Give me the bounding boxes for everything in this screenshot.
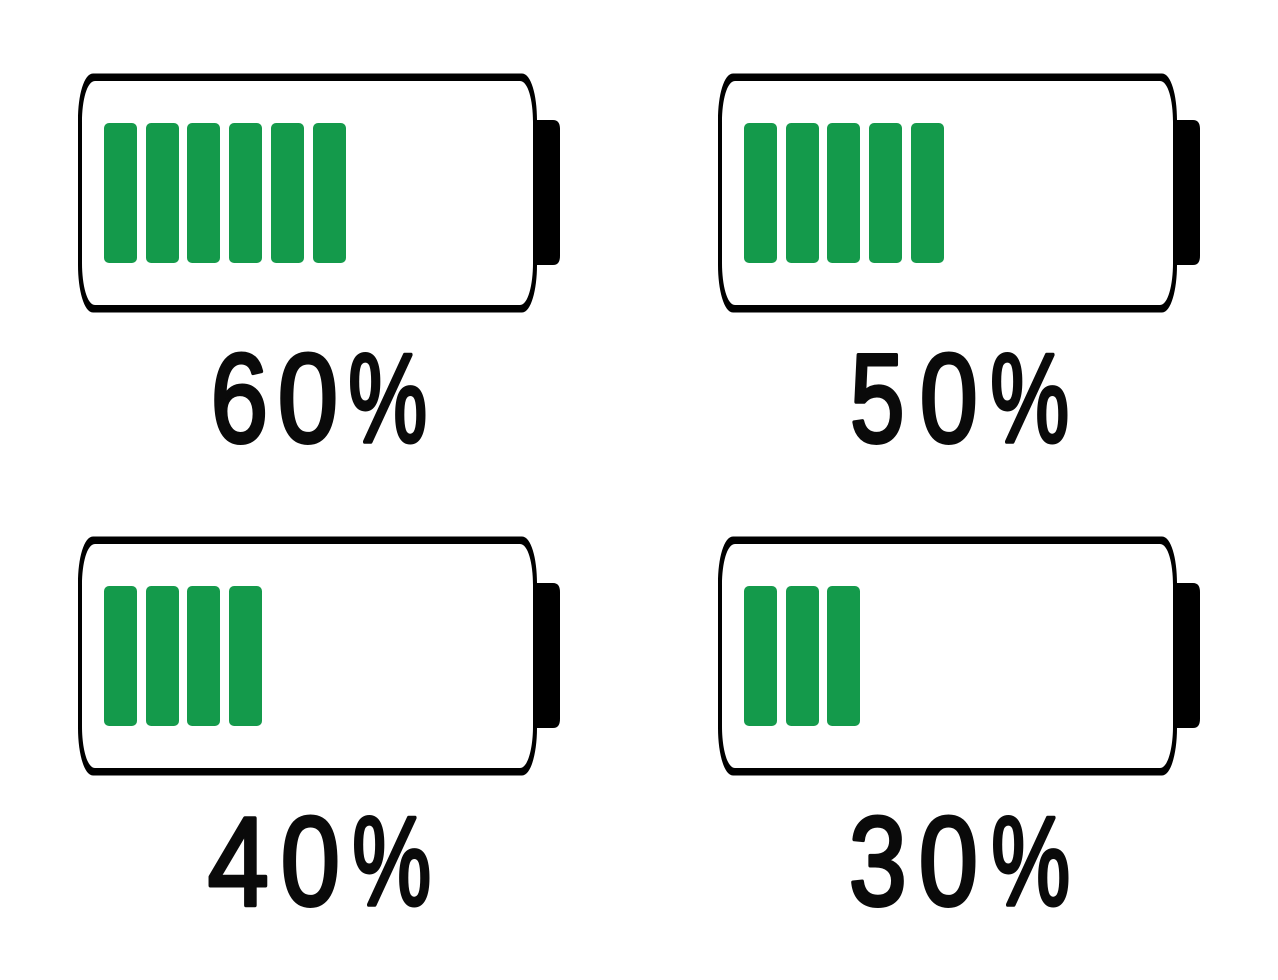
label: 40%: 0 [281, 791, 340, 932]
label: 30% [849, 791, 1070, 932]
icon: battery outline [718, 74, 1177, 312]
label: 30%: % [991, 791, 1070, 932]
label: 40%: % [352, 791, 431, 932]
charge bars: 4 segments [104, 586, 262, 726]
label: 50%: 5 [850, 328, 904, 469]
icon: battery terminal [533, 120, 560, 265]
label: 60%: 6 [211, 328, 268, 469]
label: 40% [208, 791, 431, 932]
panel: battery 40% [78, 536, 560, 932]
icon: battery terminal [533, 583, 560, 728]
label: 30%: 0 [919, 791, 978, 932]
icon: battery terminal [1173, 120, 1200, 265]
charge bars: 3 segments [744, 586, 860, 726]
panel: battery 30% [718, 536, 1200, 932]
icon: battery outline [78, 536, 537, 776]
label: 50%: % [990, 328, 1069, 469]
icon: battery outline [78, 74, 537, 312]
label: 60%: % [348, 328, 427, 469]
label: 40%: 4 [208, 791, 269, 932]
panel: battery 60% [78, 74, 560, 469]
label: 50% [850, 328, 1069, 469]
label: 30%: 3 [849, 791, 907, 932]
icon: battery terminal [1173, 583, 1200, 728]
label: 60% [211, 328, 427, 469]
icon: battery outline [718, 536, 1177, 776]
label: 50%: 0 [920, 328, 978, 469]
charge bars: 5 segments [744, 123, 944, 263]
label: 60%: 0 [278, 328, 338, 469]
charge bars: 6 segments [104, 123, 346, 263]
panel: battery 50% [718, 74, 1200, 469]
